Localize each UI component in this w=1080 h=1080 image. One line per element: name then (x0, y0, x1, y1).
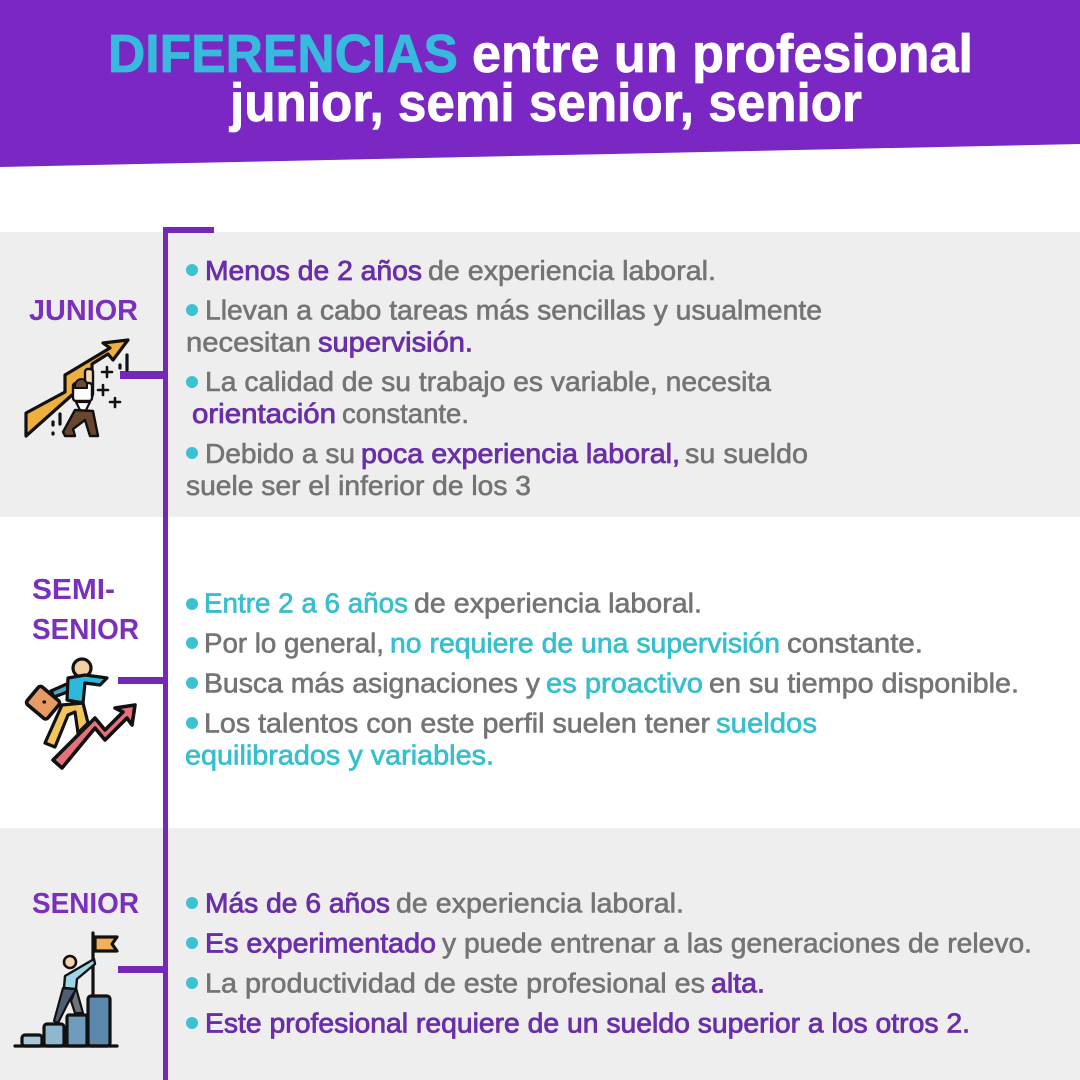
bullet: semi-senior proactive: en su tiempo disponible. (709, 668, 1019, 698)
bullet: semi-senior supervision: constante. (787, 628, 923, 658)
icon: man with briefcase climbing (25, 659, 135, 768)
title: DIFERENCIAS (108, 24, 458, 84)
header banner (0, 0, 1080, 167)
bullet: semi-senior proactive (186, 668, 1019, 698)
bullet: senior experience: y puede entrenar a las generaciones de relevo. (442, 928, 1032, 958)
heading: senior: SENIOR (32, 888, 139, 920)
bullet: junior quality: constante. (342, 398, 469, 429)
panel: junior background (0, 232, 1080, 517)
text block: junior (186, 255, 822, 501)
heading: semi-senior: SEMI- (32, 574, 115, 606)
bullet: junior years: de experiencia laboral. (428, 255, 716, 286)
bullet: senior productivity: La productividad de este profesional es (205, 968, 705, 998)
heading: junior: JUNIOR (29, 295, 138, 327)
title: junior, semi senior, senior (229, 73, 862, 133)
title: entre un profesional (472, 24, 973, 84)
bullet: senior productivity: alta. (711, 968, 765, 998)
bullet: junior quality: orientación (192, 398, 336, 429)
bullet: junior salary: poca experiencia laboral, (361, 438, 680, 469)
bullet: semi-senior years: Entre 2 a 6 años (204, 588, 408, 618)
panel: senior background (0, 828, 1080, 1080)
text block: senior (186, 888, 1032, 1038)
bullet: senior experience: Es experimentado (205, 928, 436, 958)
bullet: semi-senior salary: equilibrados y variables. (185, 740, 494, 770)
bullet: junior tasks: supervisión. (318, 326, 473, 358)
bullet: semi-senior salary: Los talentos con este perfil suelen tener (204, 708, 710, 738)
bullet: senior years: Más de 6 años (205, 888, 390, 918)
bullet: semi-senior supervision (186, 628, 923, 658)
timeline (118, 227, 214, 1080)
icon: man planting flag on bars (15, 933, 117, 1046)
bullet: senior salary: Este profesional requiere de un sueldo superior a los otros 2. (205, 1008, 970, 1038)
bullet: semi-senior proactive: Busca más asignaciones y (204, 668, 540, 698)
icon: climbing arrow (26, 340, 128, 436)
bullet: senior years (186, 888, 684, 918)
bullet: semi-senior supervision: Por lo general, (204, 628, 384, 658)
bullet: junior salary: Debido a su (205, 438, 355, 469)
heading: semi-senior (32, 574, 139, 646)
heading: semi-senior: SENIOR (32, 614, 139, 646)
bullet: semi-senior proactive: es proactivo (546, 668, 703, 698)
text block: semi-senior (185, 588, 1019, 770)
bullet: junior years: Menos de 2 años (205, 255, 422, 286)
bullet: senior experience (186, 928, 1032, 958)
bullet: semi-senior years: de experiencia laboral. (414, 588, 702, 618)
bullet: junior salary: su sueldo (685, 438, 808, 469)
bullet: semi-senior years (186, 588, 702, 618)
bullet: semi-senior salary (185, 708, 817, 770)
bullet: junior quality: La calidad de su trabajo es variable, necesita (205, 366, 772, 397)
bullet: junior quality (186, 366, 772, 429)
bullet: senior years: de experiencia laboral. (396, 888, 684, 918)
bullet: junior tasks (186, 294, 822, 358)
bullet: junior salary: suele ser el inferior de los 3 (186, 470, 531, 501)
title (108, 24, 973, 133)
bullet: semi-senior salary: sueldos (716, 708, 817, 738)
bullet: junior salary (186, 438, 808, 501)
bullet: junior tasks: necesitan (186, 326, 311, 358)
bullet: junior years (186, 255, 716, 286)
bullet: junior tasks: Llevan a cabo tareas más sencillas y usualmente (205, 294, 822, 326)
bullet: semi-senior supervision: no requiere de una supervisión (390, 628, 780, 658)
